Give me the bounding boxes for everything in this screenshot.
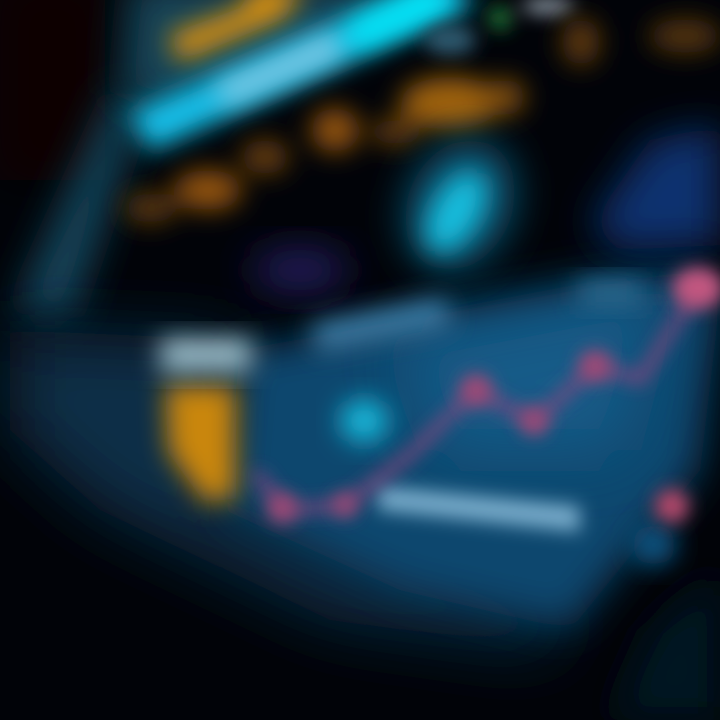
dark red glow, upper left <box>0 0 105 180</box>
top pale and green accents <box>424 0 574 55</box>
chart panel lighter centre <box>400 290 660 450</box>
purple blob <box>250 248 350 292</box>
monitor left edge <box>15 90 145 320</box>
main blue chart panel <box>225 270 720 630</box>
cyan dot <box>340 399 388 443</box>
upper right blue panel <box>590 125 720 250</box>
orange column <box>165 385 236 503</box>
pale column cap <box>160 338 252 372</box>
cyan bar <box>128 0 478 152</box>
monitor top glow <box>120 0 480 110</box>
cyan oval <box>384 121 536 289</box>
upper pale panel bar <box>310 298 452 352</box>
lower blue desk glow <box>10 330 570 650</box>
upper right orange blobs <box>562 18 720 66</box>
right pale panel bar <box>578 280 644 306</box>
pink chart nodes <box>267 267 720 523</box>
cyan oval core <box>414 162 498 262</box>
cyan bar bright end <box>345 0 450 50</box>
right dark lower corner <box>610 570 720 720</box>
lower pale bar <box>378 486 580 532</box>
pink dot with blue glow <box>632 489 689 565</box>
top orange bar <box>168 0 305 62</box>
orange blob row <box>124 77 525 223</box>
pink line chart <box>258 285 700 510</box>
cyan bar highlight <box>215 32 345 106</box>
